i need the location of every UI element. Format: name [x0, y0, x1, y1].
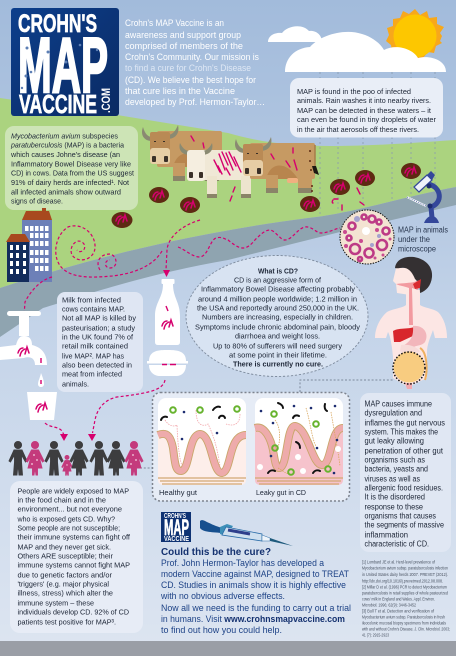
leaky gut	[255, 398, 343, 485]
text box: immune: It is the disordered	[364, 492, 425, 502]
intro text: Crohn's Community. Our mission is	[125, 52, 259, 62]
text box: MAP definition: paratuberculosis (MAP) is a bacteria	[10, 140, 125, 150]
text box: susceptibility: MAP and they never get sick.	[18, 542, 111, 552]
ellipse: What is CD?: Up to 80% of sufferers will need surgery	[213, 342, 342, 350]
rain lines	[320, 72, 435, 215]
text box: susceptibility: in the food chain and in the	[18, 496, 106, 504]
text box: rain	[290, 78, 443, 138]
tap	[0, 311, 57, 420]
call to action: Could this be the cure?	[161, 546, 271, 558]
ellipse: What is CD?: Symptoms include chronic abdominal pain, bloody	[195, 322, 360, 332]
text box: immune: bacteria, yeasts and	[364, 464, 428, 474]
text box: immune: characteristic of CD.	[364, 540, 429, 548]
intro text: to find a cure for Crohn's Disease	[125, 63, 251, 73]
text box: milk: in the UK found 7% of	[62, 332, 134, 342]
dashed pathways	[24, 220, 340, 435]
ellipse: What is CD?: Numbers are increasing, especially in children.	[202, 312, 353, 322]
call to action: to find out how you could help.	[161, 625, 282, 635]
loose bacteria	[230, 187, 364, 210]
call to action: Now all we need is the funding to carry out a trial	[161, 603, 351, 613]
green hillside	[0, 98, 456, 288]
milk bottle	[155, 279, 180, 345]
text box: MAP definition: 91% of dairy herds are infected¹. Not	[11, 178, 130, 187]
burger	[147, 350, 188, 376]
logo: .COM	[99, 88, 113, 113]
bottom bar	[0, 641, 456, 656]
text box: susceptibility: Some people are not susceptible;	[18, 524, 120, 532]
text box: susceptibility: immune system – these	[18, 598, 94, 608]
text box: rain: animals. Rain washes it into nearby rivers.	[297, 96, 431, 105]
ellipse: What is CD?: What is CD?	[258, 266, 298, 276]
text box: milk: Milk from infected	[62, 296, 121, 304]
small logo	[161, 512, 191, 543]
microscope caption: under the	[398, 235, 430, 244]
text box: immune: dysregulation and	[364, 408, 422, 418]
text box: susceptibility: due to genetic factors and/or	[18, 570, 112, 580]
syringe	[200, 520, 293, 546]
call to action	[160, 546, 351, 635]
text box: immune: inflames the gut nervous	[364, 418, 445, 428]
text box: immune: organisms such as	[364, 456, 425, 464]
text box: MAP definition: all infected animals show outward	[11, 188, 121, 196]
text box: immune: inflammation	[364, 530, 408, 540]
text box: susceptibility: individuals develop CD. 92% of CD	[18, 608, 129, 616]
large cloud	[285, 32, 446, 72]
text box: milk: pasteurisation; a study	[62, 324, 135, 332]
text box: immune: response to these	[364, 502, 423, 512]
text box: immune: viruses as well as	[364, 474, 420, 484]
intro text: awareness and support group	[125, 30, 241, 40]
logo	[11, 8, 119, 119]
pink MAP on cow 1	[191, 136, 204, 148]
ellipse: What is CD?	[186, 256, 368, 376]
text box: rain: MAP can be detected in these waters – it	[297, 106, 432, 115]
ellipse: What is CD?: diarrhoea and weight loss.	[235, 332, 320, 340]
call to action: CD. Studies in animals show it is highly effective	[161, 580, 346, 590]
text box: immune: organisms that causes	[364, 512, 436, 520]
gut labels: Healthy gut	[159, 488, 198, 497]
text box: milk: animals.	[62, 380, 89, 388]
small logo: VACCINE	[164, 536, 189, 543]
text box: immune	[360, 393, 451, 552]
microscope caption: MAP in animals	[398, 226, 448, 234]
intro text: (CD). We believe the best hope for	[125, 75, 256, 85]
ellipse: What is CD?: around 4 million people worldwide; 1.2 million in	[198, 294, 357, 304]
references: 41 (7): 2915-2923	[362, 632, 389, 638]
text box: susceptibility: patients test positive for MAP³.	[18, 618, 116, 626]
text box: milk: also been detected in	[62, 360, 132, 370]
call to action: with no obvious adverse effects.	[160, 591, 285, 601]
references: Microbiol. 1996; 62(9): 3446-3452	[362, 602, 416, 608]
text box: MAP definition: Mycobacterium avium subspecies	[11, 132, 118, 140]
text box: susceptibility: environment... but not everyone	[18, 504, 122, 514]
references: cows' milk in England and Wales. Appl. Environ.	[362, 596, 435, 602]
text box: susceptibility: People are widely exposed to MAP	[18, 486, 129, 496]
text box: rain: in the air that aerosols off these rivers.	[297, 125, 419, 134]
cow: brown back	[142, 125, 222, 181]
ellipse: What is CD?: Inflammatory Bowel Disease affecting probably	[201, 284, 355, 294]
text box: immune: system. This makes the	[364, 428, 438, 436]
microscope sample	[340, 210, 394, 264]
cow: white infected	[179, 143, 251, 198]
small logo: MAP	[164, 515, 189, 540]
text box: milk	[57, 292, 143, 392]
text box: milk: meat from infected	[62, 370, 122, 378]
text box: immune: allergenic food residues.	[364, 484, 443, 492]
text box: MAP definition: signs of disease.	[11, 196, 63, 206]
arrowheads	[20, 270, 170, 441]
family	[9, 441, 143, 475]
ellipse: What is CD?: the USA and reportedly around 250,000 in the UK.	[197, 304, 359, 312]
logo: VACCINE	[19, 89, 97, 119]
text box: immune: the segments of massive	[364, 520, 444, 530]
intro text: Crohn's MAP Vaccine is an	[125, 18, 224, 28]
text box: susceptibility: illness, stress) which alter the	[18, 588, 113, 598]
intro text: developed by Prof. Hermon-Taylor…	[125, 97, 265, 107]
tap bacteria	[18, 347, 47, 412]
healthy gut	[158, 398, 246, 485]
intro text	[125, 18, 265, 107]
ellipse: What is CD?: at some point in their lifetime.	[229, 350, 327, 360]
river	[0, 187, 456, 337]
poo patches	[112, 163, 421, 228]
small cloud	[268, 26, 322, 42]
references	[362, 560, 450, 638]
gut panel: Leaky gut in CD	[256, 488, 306, 497]
intro text: that cure lies in the Vaccine	[125, 86, 235, 96]
text box: milk: Not all MAP is killed by	[62, 314, 136, 322]
small logo: CROHN'S	[164, 513, 186, 520]
ellipse: What is CD?: CD is an aggressive form of	[234, 276, 322, 284]
ellipse: What is CD?: There is currently no cure.	[233, 360, 323, 368]
logo: CROHN'S	[18, 10, 97, 38]
text box: MAP definition: CD) in cows. Data from the US suggest	[11, 168, 135, 178]
connector gut to panel	[140, 380, 394, 468]
call to action: modern Vaccine against MAP, designed to TREAT	[161, 569, 349, 579]
call to action: in humans. Visit www.crohnsmapvaccine.com	[161, 614, 345, 624]
text box: susceptibility: who is exposed gets CD. Why?	[17, 514, 115, 524]
text box: milk: live MAP². MAP has	[62, 352, 124, 360]
text box: MAP definition: which causes Johne's disease (an	[10, 150, 120, 159]
text box: milk: retail milk contained	[62, 342, 128, 350]
text box: MAP definition	[5, 126, 138, 210]
microscope	[407, 171, 439, 223]
text box: susceptibility: their immune systems can fight off	[18, 532, 131, 542]
logo: MAP	[18, 21, 108, 109]
buildings	[6, 208, 52, 282]
person anatomy	[375, 257, 447, 389]
text box: susceptibility: 'triggers' (e.g. major physical	[18, 580, 109, 588]
text box: immune: penetration of other gut	[364, 446, 444, 456]
text box: rain: MAP is found in the poo of infected	[297, 87, 411, 96]
text box: immune: gut leaky allowing	[364, 436, 424, 446]
gut panel	[152, 392, 350, 501]
text box: susceptibility	[10, 481, 143, 633]
call to action: Prof. John Hermon-Taylor has developed a	[161, 558, 324, 568]
text box: rain: can even be found in tiny droplets of water	[297, 115, 436, 124]
text box: milk: cows contains MAP.	[62, 304, 125, 314]
references: [1] Lombard JE et al. Herd-level prevalence of	[362, 560, 436, 564]
references: [3] Bull T et al. Detection and verification of	[362, 608, 435, 614]
text box: immune: MAP causes immune	[364, 400, 432, 408]
text box: susceptibility: immune systems cannot fight MAP	[18, 560, 130, 570]
intro text: comprised of members of the	[125, 41, 243, 51]
text box: susceptibility: Others ARE susceptible; their	[18, 552, 113, 560]
microscope caption	[398, 226, 448, 254]
text box: MAP definition: Inflammatory Bowel Disease very like	[11, 160, 131, 168]
microscope caption: microscope	[398, 244, 436, 254]
cow: brown front with tail	[235, 137, 319, 193]
sun	[386, 9, 444, 60]
